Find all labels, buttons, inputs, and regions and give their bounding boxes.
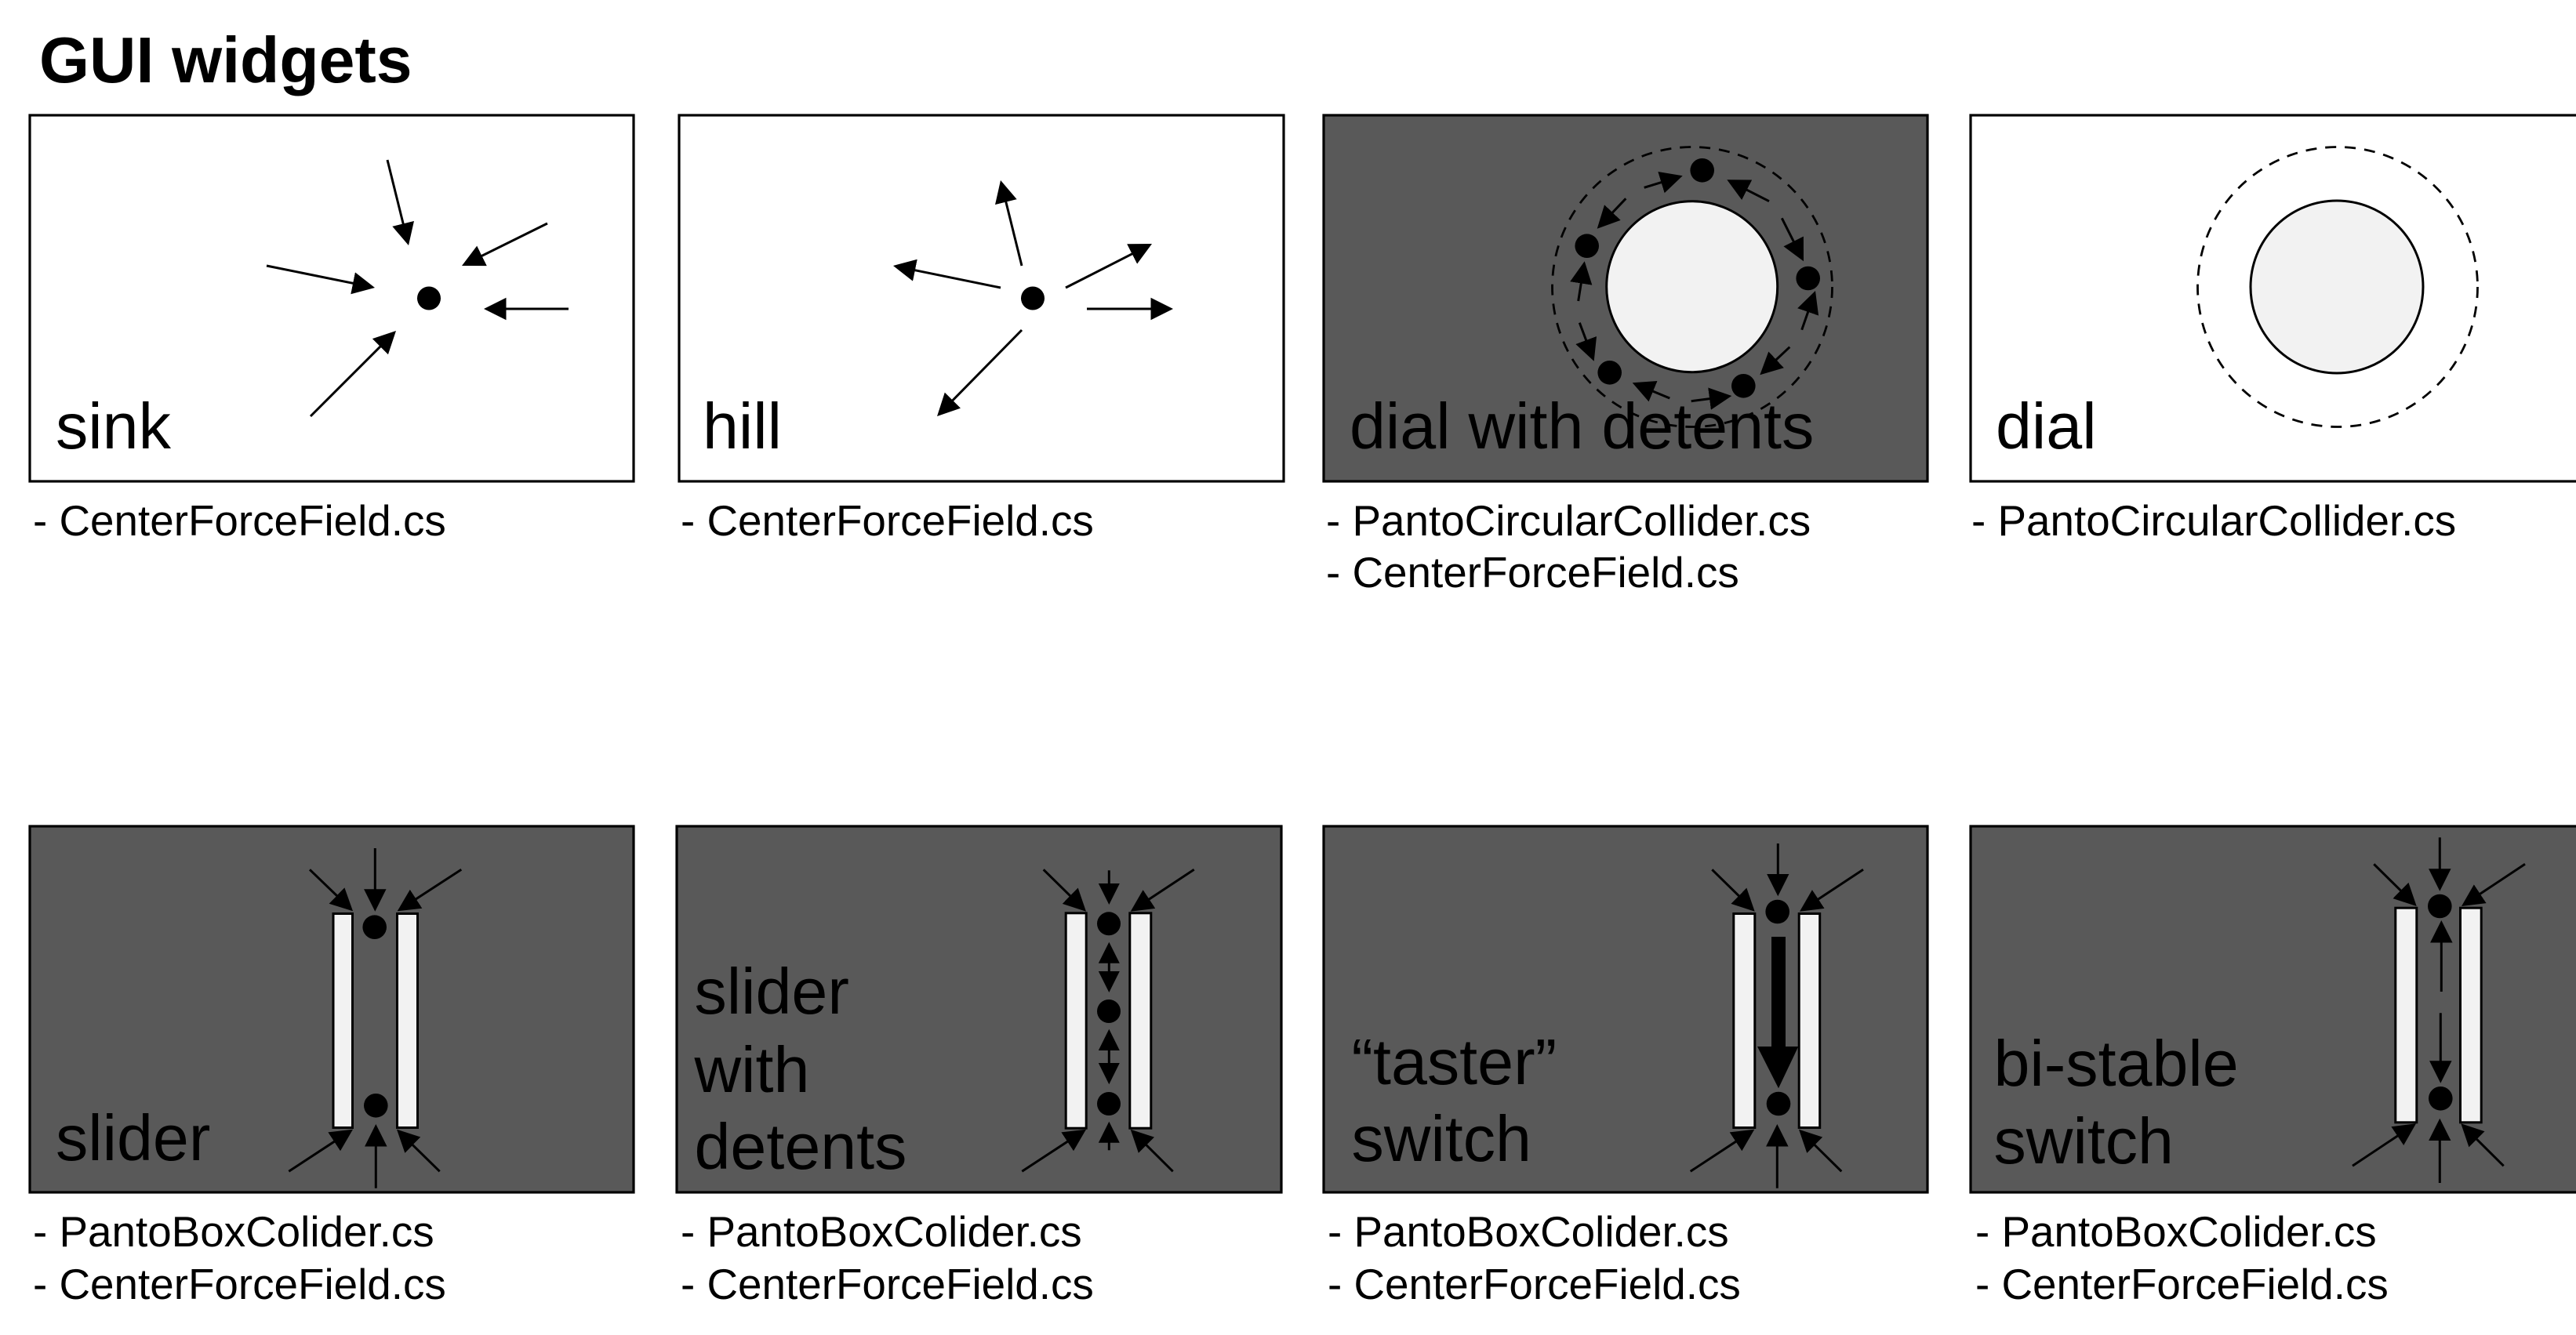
dial with detents label: dial with detents — [1350, 390, 1814, 463]
bi-stable switch label: switch — [1993, 1105, 2174, 1177]
inner detent arrows — [1099, 870, 1120, 1150]
sink force field arrows — [267, 160, 569, 416]
caption: sink: - CenterForceField.cs — [33, 496, 446, 545]
caption: taster switch: - CenterForceField.cs — [1328, 1260, 1741, 1308]
panel: bi-stable switch — [1971, 826, 2576, 1192]
slider arrows — [289, 848, 461, 1188]
slider with detents label: slider — [695, 955, 849, 1028]
slider rails — [1066, 913, 1151, 1128]
panel: slider — [30, 826, 634, 1192]
caption: taster switch: - PantoBoxColider.cs — [1328, 1207, 1729, 1256]
hill box — [679, 115, 1284, 481]
switch dots — [2428, 894, 2453, 1111]
dashed outer ring — [1553, 147, 1832, 426]
sink centre dot — [417, 287, 441, 310]
arrows — [2353, 837, 2525, 1183]
switch rails — [1734, 914, 1820, 1127]
dial with detents box — [1324, 115, 1927, 481]
panel: dial with detents — [1324, 115, 1927, 481]
caption: dial: - PantoCircularCollider.cs — [1971, 496, 2456, 545]
hill label: hill — [703, 390, 782, 463]
caption: slider: - PantoBoxColider.cs — [33, 1207, 434, 1256]
dial knob — [1607, 201, 1778, 372]
taster switch label: switch — [1352, 1102, 1531, 1175]
switch rails — [2396, 908, 2481, 1123]
panel: slider with detents — [677, 826, 1281, 1192]
taster switch box — [1324, 826, 1927, 1192]
slider rails — [333, 914, 417, 1127]
outer arrows — [1691, 843, 1863, 1188]
panel: taster switch — [1324, 826, 1927, 1192]
detent dots — [1575, 158, 1820, 398]
slider label: slider — [56, 1101, 210, 1174]
panel: dial — [1971, 115, 2576, 481]
sink label: sink — [56, 390, 172, 463]
outer arrows — [1022, 869, 1194, 1171]
panel: hill — [679, 115, 1284, 481]
sink box — [30, 115, 634, 481]
caption: slider: - CenterForceField.cs — [33, 1260, 446, 1308]
slider box — [30, 826, 634, 1192]
caption: dial with detents: - CenterForceField.cs — [1326, 548, 1739, 597]
caption: dial with detents: - PantoCircularCollider.cs — [1326, 496, 1811, 545]
dial knob — [2251, 201, 2423, 373]
slider end dots — [362, 915, 388, 1118]
panel: sink — [30, 115, 634, 481]
caption: hill: - CenterForceField.cs — [681, 496, 1094, 545]
taster switch label: “taster” — [1352, 1025, 1557, 1098]
bi-stable switch box — [1971, 826, 2576, 1192]
caption: bi-stable switch: - PantoBoxColider.cs — [1975, 1207, 2377, 1256]
switch dots — [1765, 900, 1790, 1116]
slider with detents label: with — [693, 1033, 809, 1106]
thick snap arrow — [1757, 937, 1798, 1088]
bi-stable switch label: bi-stable — [1993, 1027, 2239, 1100]
detent dots — [1097, 912, 1121, 1116]
dashed outer ring — [2197, 147, 2478, 426]
dial label: dial — [1996, 390, 2097, 463]
hill force field arrows — [893, 180, 1173, 416]
caption: bi-stable switch: - CenterForceField.cs — [1975, 1260, 2389, 1308]
dial box — [1971, 115, 2576, 481]
caption: slider with detents: - CenterForceField.cs — [681, 1260, 1094, 1308]
detent arrows — [1579, 176, 1815, 401]
slider with detents box — [677, 826, 1281, 1192]
hill centre dot — [1021, 287, 1045, 310]
caption: slider with detents: - PantoBoxColider.cs — [681, 1207, 1082, 1256]
slider with detents label: detents — [695, 1110, 907, 1183]
title: GUI widgets — [39, 24, 412, 96]
